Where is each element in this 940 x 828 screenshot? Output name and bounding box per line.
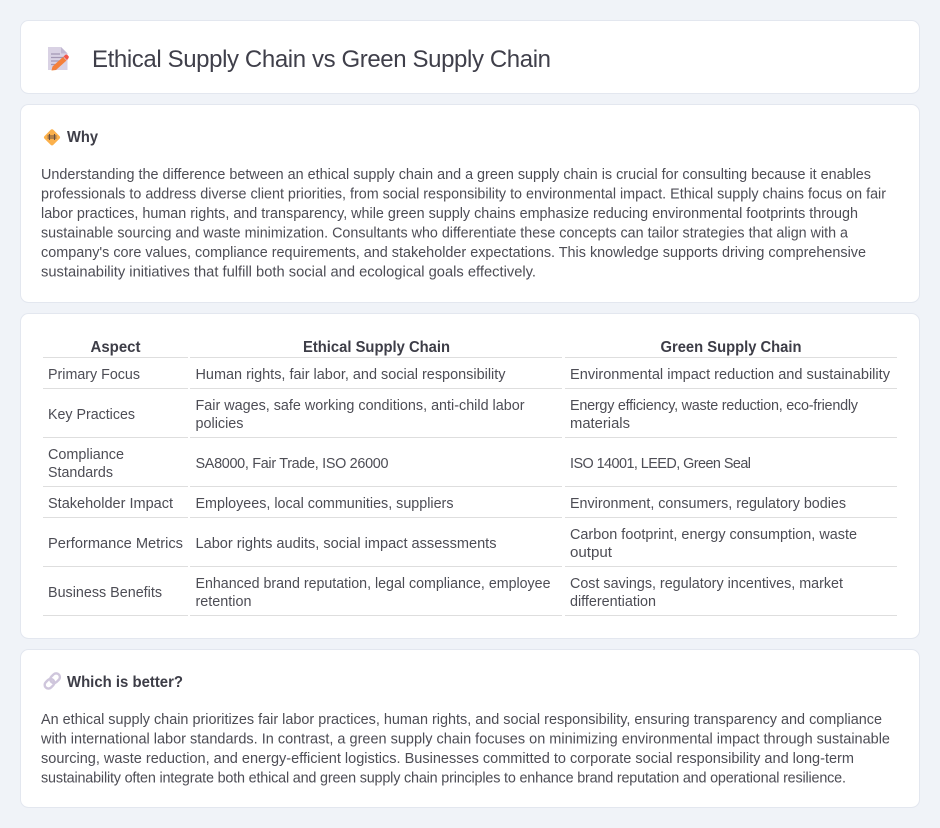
row: primary focus: Primary Focus (48, 367, 140, 383)
panel: why (20, 104, 920, 302)
row: key practices: Fair wages, safe working conditions, anti-child labor (196, 398, 525, 414)
text block: which is better paragraph: sustainability often integrate both ethical and green supply chain principles to enhance brand reputation and operational resilience. (41, 770, 846, 786)
row: business benefits: Enhanced brand reputation, legal compliance, employee (196, 576, 550, 592)
row: compliance standards: Compliance (48, 447, 124, 463)
table header (90, 339, 802, 356)
row: key practices (48, 398, 859, 432)
row: compliance standards (48, 447, 751, 481)
panel: which is better (20, 650, 920, 808)
row: performance metrics: Performance Metrics (48, 536, 183, 552)
row: business benefits: Cost savings, regulatory incentives, market (570, 576, 843, 592)
table header: Aspect (90, 339, 141, 356)
table header: Green Supply Chain (660, 339, 802, 356)
title: Ethical Supply Chain vs Green Supply Chain (92, 46, 551, 73)
row: business benefits: Business Benefits (48, 585, 162, 601)
text block: why paragraph (41, 167, 886, 280)
row: primary focus (48, 367, 891, 383)
text block: which is better paragraph (40, 712, 890, 786)
row: stakeholder impact (48, 496, 846, 512)
row: compliance standards: ISO 14001, LEED, Green Seal (570, 456, 751, 472)
row: key practices: Key Practices (48, 407, 135, 423)
row: stakeholder impact: Employees, local communities, suppliers (196, 496, 454, 512)
table rules (43, 357, 897, 616)
row: primary focus: Human rights, fair labor, and social responsibility (196, 367, 506, 383)
heading: which is better: Which is better? (67, 674, 183, 691)
panel: comparison table (20, 314, 920, 638)
icon: orange diamond sign (43, 129, 61, 146)
heading: why: Why (67, 129, 98, 146)
row: performance metrics: Carbon footprint, energy consumption, waste (570, 527, 857, 543)
text block: why paragraph: professionals to address diverse client priorities, from social responsibility to environmental impact. Ethical supply chains focus on fair (41, 186, 886, 202)
row: compliance standards: SA8000, Fair Trade, ISO 26000 (196, 456, 388, 472)
row: key practices: Energy efficiency, waste reduction, eco-friendly (570, 398, 859, 414)
row: performance metrics (48, 527, 857, 561)
text block: why paragraph: company's core values, compliance requirements, and stakeholder expectations. This knowledge supports driving comprehensive (41, 245, 866, 261)
text block: which is better paragraph: An ethical supply chain prioritizes fair labor practices, human rights, and social responsibility, ensuring transparency and compliance (41, 712, 882, 728)
text block: why paragraph: sustainable sourcing and waste minimization. Consultants who differentiate these concepts can tailor strategies that align with a (41, 226, 848, 242)
row: key practices: materials (570, 416, 630, 432)
text block: which is better paragraph: sourcing, waste reduction, and energy-efficient logistics. Businesses committed to corporate social responsibility and long-term (41, 751, 854, 767)
row: business benefits: differentiation (570, 594, 656, 610)
row: stakeholder impact: Environment, consumers, regulatory bodies (570, 496, 846, 512)
table header: Ethical Supply Chain (303, 339, 450, 356)
row: performance metrics: Labor rights audits, social impact assessments (196, 536, 496, 552)
text block: why paragraph: sustainability initiatives that fulfill both social and ecological goals effectively. (41, 264, 536, 280)
row: performance metrics: output (570, 545, 612, 561)
text block: why paragraph: labor practices, human rights, and transparency, while green supply chains emphasize reducing environmental footprints through (41, 206, 858, 222)
row: business benefits (48, 576, 843, 610)
row: key practices: policies (196, 416, 244, 432)
row: business benefits: retention (196, 594, 252, 610)
row: primary focus: Environmental impact reduction and sustainability (570, 367, 891, 383)
icon: chain link (43, 672, 61, 690)
text block: why paragraph: Understanding the difference between an ethical supply chain and a green supply chain is crucial for consulting because it enables (41, 167, 871, 183)
icon: document with pencil (48, 47, 69, 70)
panel: header (20, 20, 920, 94)
row: compliance standards: Standards (48, 465, 113, 481)
row: stakeholder impact: Stakeholder Impact (48, 496, 173, 512)
text block: which is better paragraph: with international labor standards. In contrast, a green supply chain focuses on minimizing environmental impact through sustainable (40, 732, 890, 748)
